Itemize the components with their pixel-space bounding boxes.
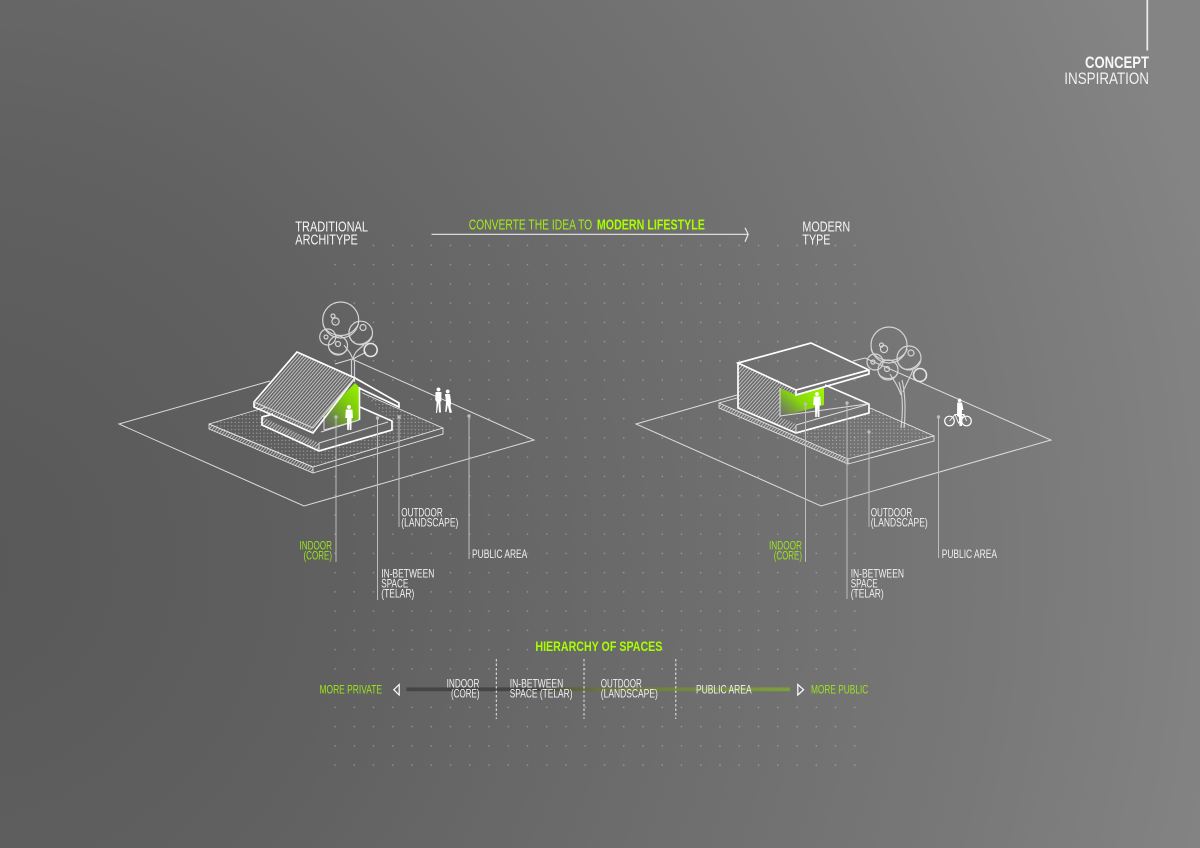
space labels: INDOOR bbox=[447, 676, 480, 690]
heading: convert idea: CONVERTE THE IDEA TO bbox=[469, 217, 592, 234]
labels: PUBLIC AREA bbox=[472, 547, 527, 561]
section tag: concept inspiration: INSPIRATION bbox=[1064, 69, 1149, 88]
labels: IN-BETWEEN bbox=[851, 566, 904, 580]
heading: traditional architype bbox=[295, 219, 368, 248]
space labels: (CORE) bbox=[451, 686, 480, 700]
core: green wall bbox=[324, 383, 359, 430]
labels: IN-BETWEEN bbox=[381, 566, 434, 580]
labels: PUBLIC AREA bbox=[942, 547, 997, 561]
heading: modern type bbox=[802, 219, 850, 248]
hierarchy of spaces bbox=[320, 638, 869, 719]
labels: (LANDSCAPE) bbox=[871, 516, 928, 530]
right arrowhead bbox=[798, 684, 804, 695]
heading: modern type: MODERN bbox=[802, 219, 850, 236]
building bbox=[738, 343, 869, 433]
space labels: (LANDSCAPE) bbox=[601, 686, 658, 700]
terrace bbox=[719, 398, 934, 464]
space labels: SPACE (TELAR) bbox=[510, 686, 573, 700]
labels: (LANDSCAPE) bbox=[401, 516, 458, 530]
person bbox=[345, 405, 353, 430]
platform bbox=[262, 391, 392, 451]
dot grid bbox=[333, 243, 857, 768]
space labels bbox=[447, 676, 752, 700]
section tag: concept inspiration bbox=[1064, 0, 1149, 88]
labels: OUTDOOR bbox=[401, 506, 443, 520]
heading: modern type: TYPE bbox=[802, 231, 830, 248]
labels bbox=[300, 506, 527, 600]
hierarchy title: HIERARCHY OF SPACES bbox=[535, 638, 662, 654]
end labels: MORE PRIVATE bbox=[320, 682, 382, 696]
heading: traditional architype: ARCHITYPE bbox=[295, 231, 358, 248]
labels: INDOOR bbox=[300, 538, 332, 552]
diagram: modern house bbox=[636, 327, 1051, 600]
labels: INDOOR bbox=[769, 538, 802, 552]
dividers bbox=[496, 659, 676, 719]
labels bbox=[769, 506, 997, 600]
section tag: concept inspiration: CONCEPT bbox=[1085, 53, 1149, 72]
heading: traditional architype: TRADITIONAL bbox=[295, 219, 368, 236]
diagram: traditional house bbox=[119, 302, 534, 600]
arrow: to modern bbox=[432, 228, 748, 242]
leader lines bbox=[335, 415, 470, 600]
labels: (TELAR) bbox=[381, 586, 414, 600]
site plot bbox=[636, 358, 1051, 506]
leader lines bbox=[804, 402, 940, 599]
cyclist bbox=[945, 398, 971, 426]
left arrowhead bbox=[394, 684, 399, 695]
labels: (CORE) bbox=[304, 548, 332, 562]
tree bbox=[867, 327, 926, 428]
roof bbox=[254, 352, 399, 433]
people bbox=[435, 388, 452, 413]
end labels: MORE PUBLIC bbox=[811, 682, 869, 696]
space labels: IN-BETWEEN bbox=[510, 676, 563, 690]
heading: convert idea: MODERN LIFESTYLE bbox=[597, 217, 705, 234]
tree bbox=[320, 302, 377, 382]
core: green wall bbox=[780, 387, 824, 417]
space labels: PUBLIC AREA bbox=[696, 682, 752, 696]
end labels bbox=[320, 682, 869, 696]
site plot bbox=[119, 359, 534, 506]
person bbox=[813, 392, 821, 417]
labels: OUTDOOR bbox=[871, 506, 912, 520]
labels: SPACE bbox=[851, 576, 878, 590]
gable outline bbox=[324, 414, 359, 430]
labels: (TELAR) bbox=[851, 586, 884, 600]
labels: SPACE bbox=[381, 576, 408, 590]
gradient bar bbox=[406, 687, 790, 691]
gable post bbox=[358, 387, 360, 420]
labels: (CORE) bbox=[774, 548, 802, 562]
terrace bbox=[209, 386, 443, 473]
space labels: OUTDOOR bbox=[601, 676, 642, 690]
